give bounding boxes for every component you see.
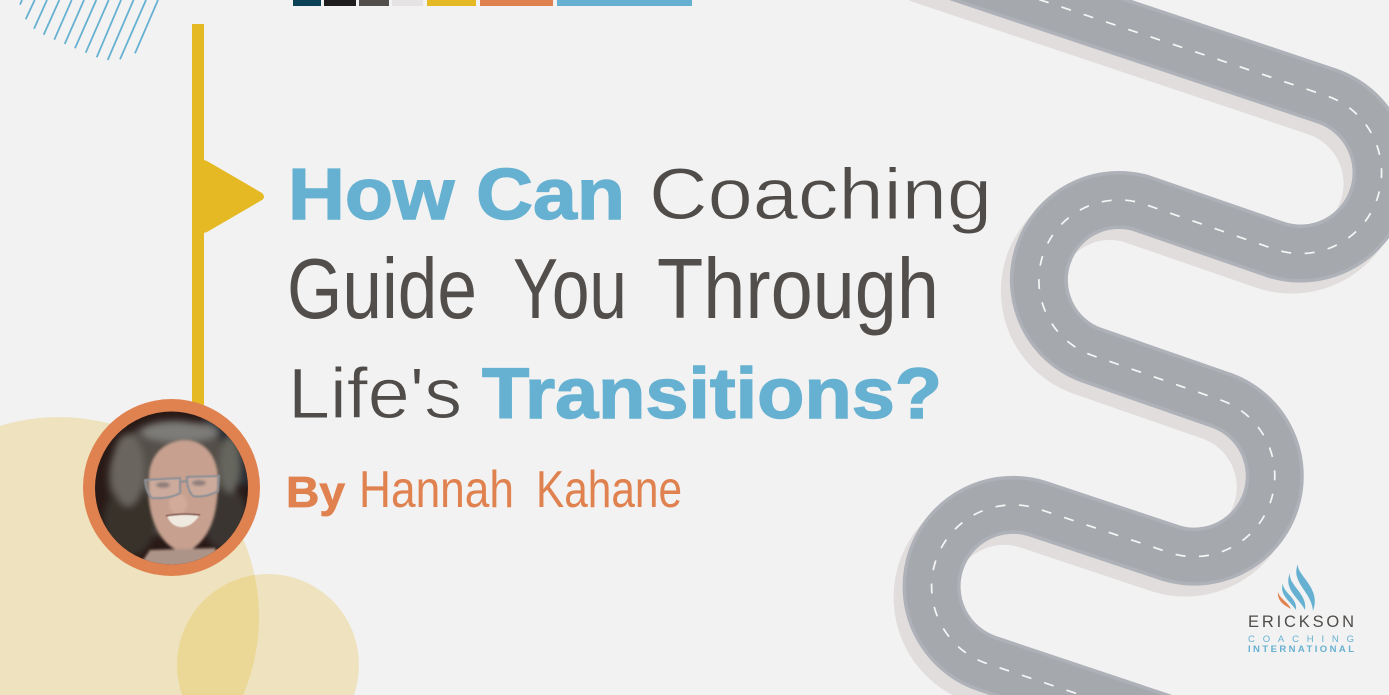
flag — [192, 24, 264, 409]
title line 1: Coaching — [649, 155, 992, 235]
road centre dashes — [928, 0, 1382, 695]
hatch pattern — [20, 0, 158, 60]
logo flames — [1278, 564, 1315, 611]
title line 1 — [288, 155, 992, 235]
author portrait — [83, 399, 260, 576]
logo: INTERNATIONAL — [1248, 644, 1354, 655]
title — [287, 155, 992, 434]
title line 2: Guide — [287, 242, 477, 337]
logo: COACHING — [1248, 634, 1354, 645]
road shadow — [919, 0, 1373, 695]
title line 1: How Can — [288, 155, 625, 235]
logo: ERICKSON — [1248, 613, 1354, 631]
title line 2: Through — [657, 242, 939, 337]
title line 3: Life's — [288, 355, 462, 434]
face — [142, 438, 220, 564]
byline: Hannah — [359, 461, 514, 519]
logo — [1248, 564, 1354, 655]
title line 2: You — [513, 242, 627, 337]
road — [919, 0, 1382, 695]
title line 3: Transitions? — [482, 355, 942, 434]
road edge — [928, 0, 1382, 695]
background circles — [0, 417, 359, 695]
road surface — [928, 0, 1382, 695]
byline — [286, 461, 682, 519]
palette chips — [293, 0, 692, 6]
smile — [166, 514, 200, 527]
byline: Kahane — [536, 461, 682, 519]
glasses — [145, 476, 219, 498]
title line 2 — [287, 242, 939, 337]
byline: By — [286, 468, 346, 517]
title line 3 — [288, 355, 942, 434]
